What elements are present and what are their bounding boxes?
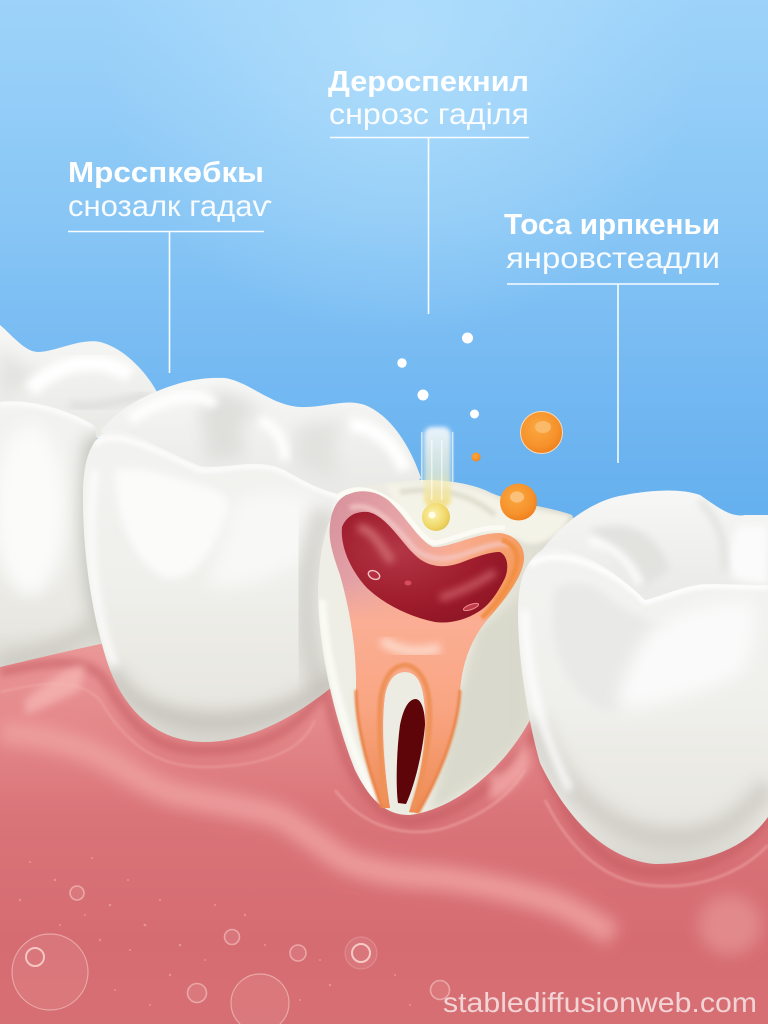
right molar buccal face — [518, 548, 768, 864]
label: centre callout — [328, 66, 529, 314]
far-left molar buccal face — [0, 402, 102, 667]
dentin outline around pulp — [336, 490, 505, 543]
white particle dots — [397, 332, 479, 418]
far-left molar occlusal surface — [0, 325, 161, 440]
second molar occlusal surface — [100, 378, 421, 500]
gum — [0, 644, 768, 1024]
gum speckles — [19, 857, 411, 1006]
left callout leader line — [68, 232, 264, 373]
centre callout title: Дероспекнил — [328, 66, 529, 98]
centre callout leader line — [330, 138, 529, 314]
root canal dark gap — [397, 699, 425, 804]
cross-section tooth — [318, 480, 600, 815]
far-left molar — [0, 325, 161, 667]
label: left callout — [68, 157, 272, 373]
gum bubbles — [12, 886, 450, 1024]
label: right callout — [504, 209, 720, 463]
left callout subtitle: снозалк гадаѵ — [68, 190, 272, 223]
spray stream with yellow droplet — [421, 427, 454, 531]
pulp blood cavity — [342, 512, 507, 623]
left callout title: Мрсспкөбкы — [68, 157, 264, 189]
centre callout subtitle: снрозс гаділя — [329, 98, 529, 131]
watermark: stablediffusionweb.com — [443, 987, 757, 1018]
second molar — [83, 378, 421, 742]
orange bubbles — [472, 412, 562, 520]
pulp chamber and roots — [330, 491, 524, 813]
right molar — [518, 490, 768, 864]
right callout title: Тоса ирпкеньи — [504, 209, 720, 241]
right molar occlusal surface — [542, 490, 768, 600]
second molar buccal face — [83, 429, 345, 742]
right callout subtitle: янровстеадли — [506, 242, 720, 275]
right callout leader line — [507, 284, 719, 463]
